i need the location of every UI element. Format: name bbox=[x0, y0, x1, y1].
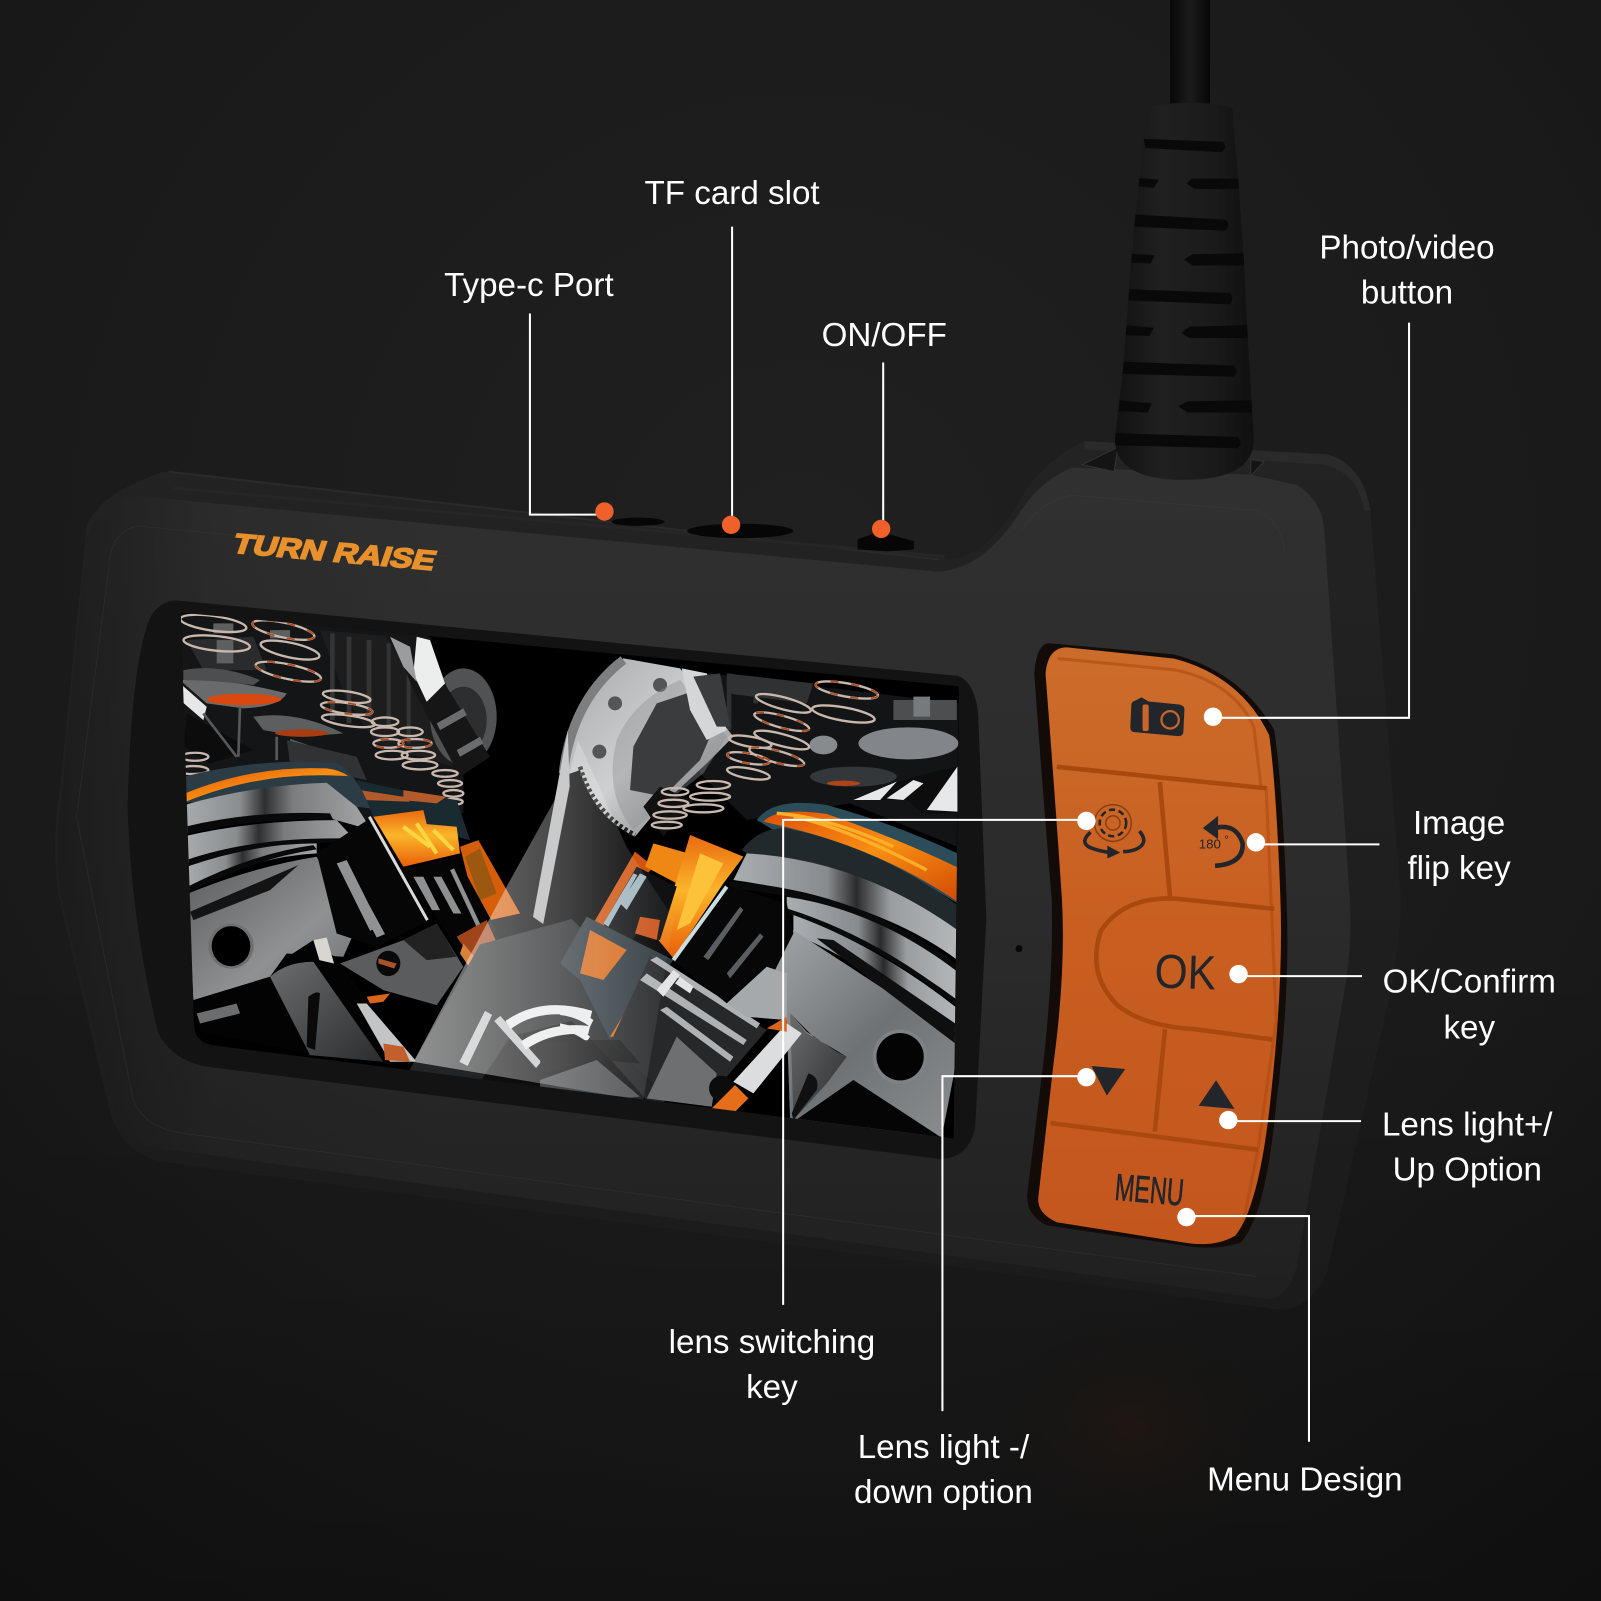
keypad surface bbox=[1038, 647, 1281, 1244]
MENU key label: MENU bbox=[1113, 1166, 1186, 1214]
left valve train base bbox=[180, 613, 463, 820]
icon: 180 flip: 180 bbox=[1199, 836, 1221, 851]
valve springs left bbox=[178, 612, 463, 805]
callout labels: Up Option bbox=[1393, 1151, 1542, 1188]
callout labels: Image bbox=[1413, 805, 1505, 842]
callout labels: Menu Design bbox=[1207, 1462, 1403, 1499]
left rods, pin block and lower shadow bbox=[193, 817, 517, 1062]
gear and right engine bbox=[540, 658, 958, 1137]
crank area under the glare bbox=[408, 919, 674, 1108]
callout labels: button bbox=[1361, 274, 1453, 311]
OK key label: OK bbox=[1154, 945, 1217, 1000]
icon: up triangle bbox=[1199, 1080, 1234, 1109]
icon: down triangle bbox=[1091, 1066, 1125, 1096]
callout labels: Lens light -/ bbox=[858, 1429, 1030, 1466]
callout labels: Type-c Port bbox=[444, 267, 614, 304]
callout labels: OK/Confirm bbox=[1383, 963, 1556, 1000]
microphone hole bbox=[1015, 945, 1023, 952]
icon: lens switching bbox=[1085, 805, 1144, 858]
timing gear bbox=[562, 658, 733, 837]
right secondary cylinders bbox=[560, 835, 743, 1040]
timing belt highlight bbox=[533, 730, 570, 924]
key dividers bbox=[1051, 659, 1276, 1220]
callout labels: down option bbox=[854, 1474, 1033, 1511]
camshaft and gear bbox=[383, 633, 497, 777]
callout leader lines bbox=[530, 227, 1409, 1442]
right valve train base bbox=[680, 670, 958, 847]
device body bbox=[55, 441, 1401, 1310]
screen: engine picture bbox=[174, 602, 970, 1154]
callout labels: flip key bbox=[1407, 850, 1511, 887]
screen bezel bbox=[128, 600, 986, 1159]
left secondary cylinders bbox=[357, 780, 520, 926]
control keypad bbox=[1027, 643, 1287, 1248]
callout labels: key bbox=[1443, 1009, 1496, 1046]
icon: camera bbox=[1130, 697, 1184, 736]
callout labels: Lens light+/ bbox=[1382, 1106, 1553, 1143]
callout labels: ON/OFF bbox=[822, 317, 947, 354]
ports on the top edge bbox=[612, 518, 914, 551]
cable and strain relief bbox=[1115, 0, 1254, 480]
left piston bbox=[183, 762, 372, 1000]
callout labels: lens switching bbox=[669, 1324, 875, 1361]
valve springs right bbox=[652, 678, 879, 828]
callout labels: key bbox=[746, 1369, 798, 1406]
icon: 180 flip bbox=[1199, 816, 1243, 866]
reflection glare bbox=[414, 740, 674, 1101]
left engine bbox=[178, 612, 520, 1062]
callout labels: TF card slot bbox=[645, 175, 820, 212]
callout labels: Photo/video bbox=[1319, 229, 1495, 266]
icon: 180 flip: ° bbox=[1224, 834, 1229, 846]
right piston bbox=[673, 803, 957, 1137]
right lower stack bbox=[540, 957, 767, 1112]
orange marker dots bbox=[595, 502, 890, 538]
keypad shadow border bbox=[1027, 643, 1287, 1248]
callout labels bbox=[444, 175, 1556, 1511]
white marker dots bbox=[1077, 708, 1265, 1226]
brand logo: TURN RAISE bbox=[229, 528, 440, 576]
